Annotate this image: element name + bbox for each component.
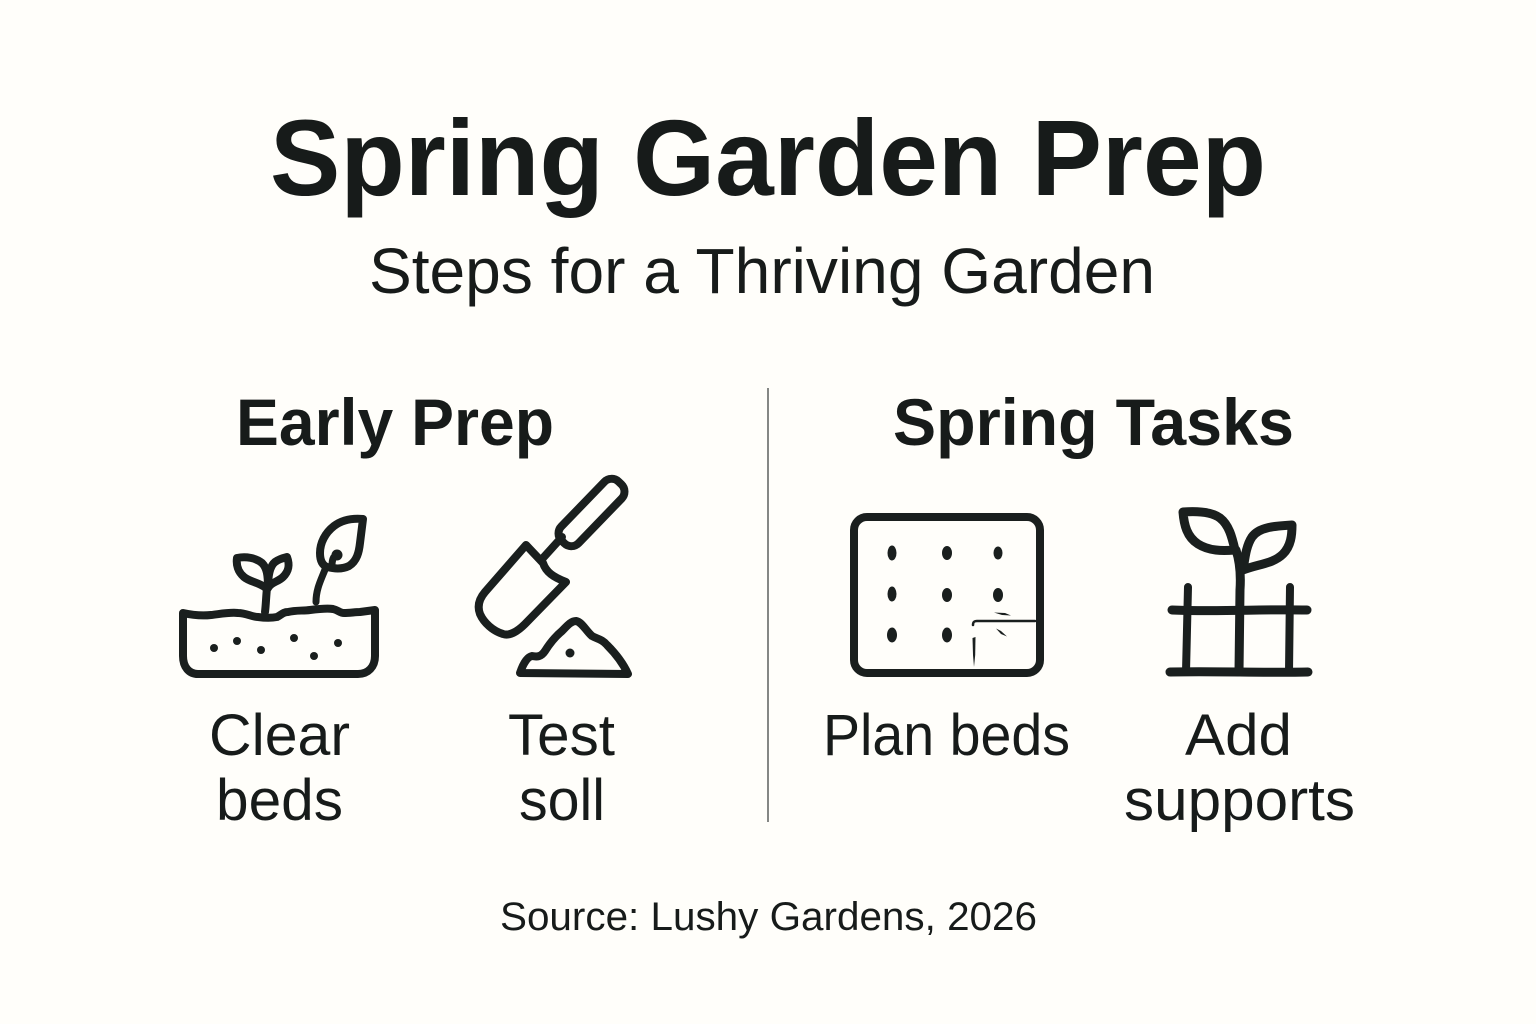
subtitle: Steps for a Thriving Garden [369,235,1155,307]
source: Source: Lushy Gardens, 2026 [500,895,1037,939]
heading: spring tasks: Spring Tasks [893,385,1294,459]
label: add supports: Add [1185,703,1292,768]
label: clear beds: Clear [209,703,350,768]
icon: plant on support trellis [1170,512,1308,672]
label: clear beds: beds [216,768,343,833]
panel: early prep [183,385,629,833]
heading: early prep: Early Prep [236,385,554,459]
label: test soil: Test [508,703,615,768]
label: clear beds [209,703,350,833]
label: add supports [1124,703,1355,833]
label: plan beds: Plan beds [823,703,1070,768]
panel: spring tasks [823,385,1355,833]
label: test soil: soll [519,768,605,833]
icon: bed plan grid [854,517,1040,673]
label: test soil [508,703,615,833]
label: add supports: supports [1124,768,1355,833]
icon: trowel and soil mound [479,475,629,674]
icon: seedlings in soil bed [183,519,375,674]
title: Spring Garden Prep [270,97,1266,218]
